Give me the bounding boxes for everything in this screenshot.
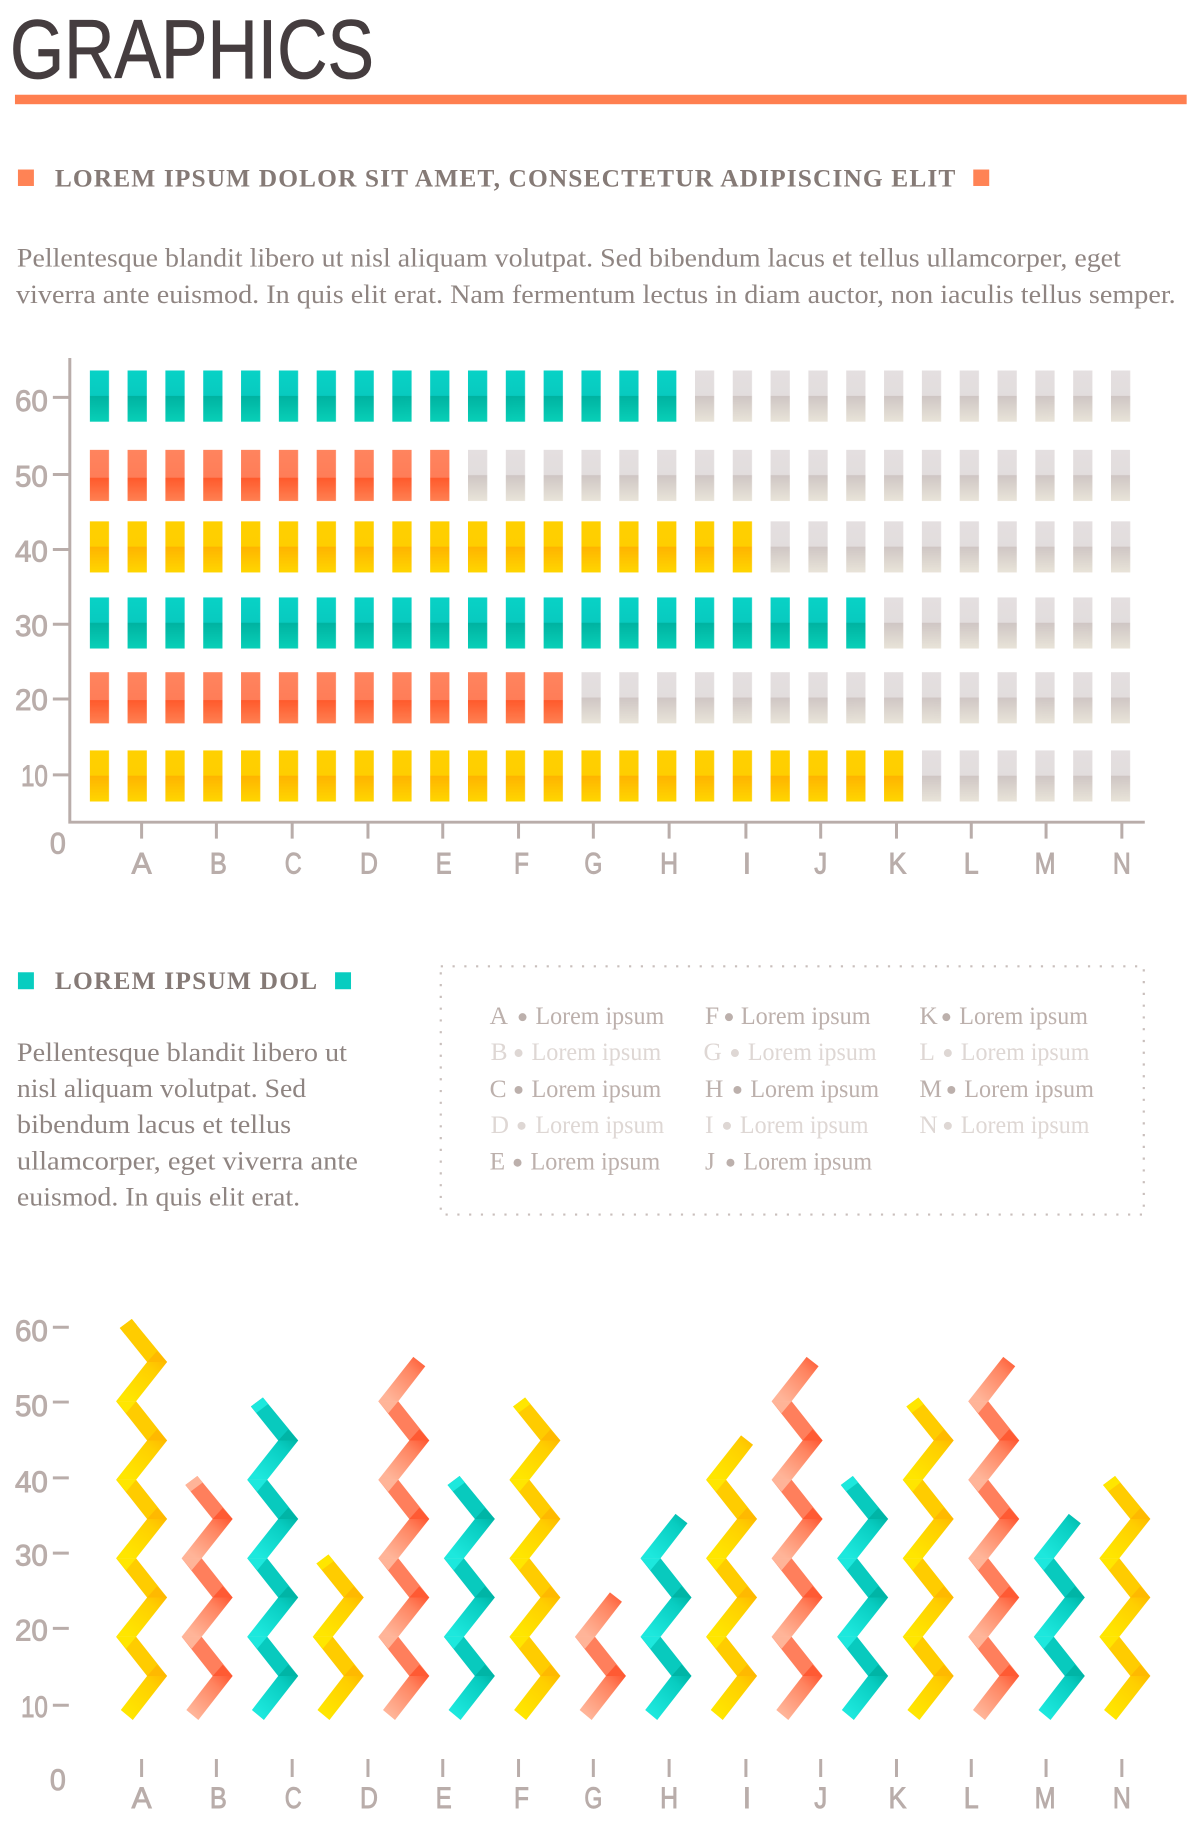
heading: section two: LOREM IPSUM DOL: [55, 967, 317, 995]
legend column three: K: [919, 1002, 938, 1030]
row 50: orange: [90, 450, 1130, 501]
legend column three: M: [919, 1075, 942, 1103]
chart one x labels: B: [210, 848, 227, 881]
chart one y labels: 10: [21, 760, 48, 793]
zigzag 4 yellow: [313, 1554, 364, 1720]
chart two x labels: D: [360, 1782, 378, 1815]
chart two x labels: G: [584, 1782, 602, 1815]
chart one x labels: I: [743, 848, 751, 881]
chart two x labels: K: [889, 1782, 906, 1815]
chart one y labels: 30: [15, 610, 48, 643]
chart one x labels: C: [285, 848, 302, 881]
zigzag 5 orange: [378, 1357, 429, 1720]
chart two ticks: [53, 1327, 1122, 1777]
zigzag 9 teal: [640, 1514, 692, 1720]
chart two y labels: 0: [50, 1764, 66, 1797]
chart one x labels: E: [436, 848, 452, 881]
row 30: teal: [90, 597, 1130, 649]
legend column three: Lorem ipsum: [961, 1111, 1090, 1139]
legend column one: [490, 1002, 664, 1176]
legend column two: J: [705, 1148, 715, 1176]
chart: zigzag columns: [116, 1319, 1150, 1720]
chart two x labels: C: [285, 1782, 302, 1815]
chart one y labels: 40: [15, 535, 48, 568]
chart one y labels: 20: [15, 684, 48, 717]
chart two y labels: 10: [21, 1691, 48, 1724]
legend column two: Lorem ipsum: [743, 1148, 872, 1176]
title: GRAPHICS: [10, 2, 374, 96]
legend column three: N: [919, 1111, 938, 1139]
legend column two: Lorem ipsum: [741, 1002, 871, 1030]
chart: block bars: [90, 370, 1131, 802]
zigzag 11 orange: [772, 1357, 823, 1720]
chart two x labels: N: [1113, 1782, 1131, 1815]
chart two x labels: J: [814, 1782, 827, 1815]
legend column two: H: [705, 1075, 723, 1103]
chart one y labels: [15, 385, 66, 861]
zigzag 12 teal: [837, 1476, 888, 1720]
chart two x labels: B: [210, 1782, 227, 1815]
chart two x labels: E: [436, 1782, 452, 1815]
legend column one: E: [490, 1148, 505, 1176]
legend column two: I: [705, 1111, 713, 1139]
chart one x labels: A: [132, 848, 152, 881]
chart one y labels: 0: [50, 828, 66, 861]
legend column three: Lorem ipsum: [959, 1002, 1088, 1030]
chart one y labels: 50: [15, 461, 48, 494]
legend column one: Lorem ipsum: [531, 1148, 660, 1176]
chart one x labels: M: [1035, 848, 1056, 881]
legend column one: A: [490, 1002, 509, 1030]
section two paragraph: Pellentesque blandit libero ut: [17, 1037, 348, 1067]
chart two x labels: I: [743, 1782, 751, 1815]
legend box: [441, 966, 1144, 1215]
chart two x labels: A: [132, 1782, 152, 1815]
title rule: [15, 95, 1187, 104]
chart two x labels: M: [1035, 1782, 1056, 1815]
legend column two: Lorem ipsum: [748, 1038, 877, 1066]
zigzag 14 orange: [968, 1357, 1019, 1720]
chart two y labels: 50: [15, 1390, 48, 1423]
section two paragraph: ullamcorper, eget viverra ante: [17, 1146, 358, 1176]
chart two y labels: [15, 1315, 66, 1797]
section two paragraph: bibendum lacus et tellus: [17, 1109, 291, 1139]
chart one x labels: G: [584, 848, 602, 881]
chart one x labels: F: [514, 848, 529, 881]
intro paragraph: [16, 242, 1176, 309]
chart one x labels: L: [964, 848, 979, 881]
row 60: teal: [90, 370, 1131, 422]
chart one x labels: J: [814, 848, 827, 881]
legend column two: [704, 1002, 879, 1176]
zigzag 7 yellow: [509, 1398, 560, 1720]
zigzag 1 yellow: [116, 1319, 167, 1720]
intro paragraph: Pellentesque blandit libero ut nisl aliquam volutpat. Sed bibendum lacus et tellus ullamcorper, eget: [17, 242, 1121, 272]
zigzag 2 orange: [182, 1476, 233, 1720]
chart two x labels: L: [964, 1782, 979, 1815]
legend column one: Lorem ipsum: [535, 1111, 664, 1139]
section two paragraph: [17, 1037, 358, 1212]
legend column one: Lorem ipsum: [535, 1002, 664, 1030]
chart one x labels: N: [1113, 848, 1131, 881]
legend column three: L: [919, 1038, 935, 1066]
zigzag 3 teal: [247, 1398, 298, 1720]
chart two y labels: 30: [15, 1540, 48, 1573]
chart one x labels: D: [360, 848, 378, 881]
legend column two: Lorem ipsum: [750, 1075, 879, 1103]
chart one x labels: [132, 848, 1131, 881]
chart two x labels: [132, 1782, 1131, 1815]
legend column three: Lorem ipsum: [964, 1075, 1094, 1103]
zigzag 6 teal: [444, 1476, 495, 1720]
legend column one: Lorem ipsum: [532, 1075, 661, 1103]
zigzag 13 yellow: [903, 1398, 954, 1720]
heading: section one: LOREM IPSUM DOLOR SIT AMET, CONSECTETUR ADIPISCING ELIT: [55, 164, 955, 192]
legend column two: G: [704, 1038, 722, 1066]
zigzag 16 yellow: [1099, 1476, 1150, 1720]
legend column one: Lorem ipsum: [532, 1038, 661, 1066]
chart two y labels: 60: [15, 1315, 48, 1348]
zigzag 10 yellow: [706, 1435, 757, 1720]
chart two y labels: 40: [15, 1466, 48, 1499]
intro paragraph: viverra ante euismod. In quis elit erat. Nam fermentum lectus in diam auctor, non iaculis tellus semper.: [16, 279, 1176, 309]
row 10: yellow: [90, 750, 1130, 802]
legend column three: Lorem ipsum: [961, 1038, 1090, 1066]
chart one y labels: 60: [15, 385, 48, 418]
row 40: yellow: [90, 521, 1131, 573]
legend column two: F: [705, 1002, 719, 1030]
legend column one: D: [491, 1111, 509, 1139]
legend column two: Lorem ipsum: [740, 1111, 869, 1139]
chart two x labels: F: [514, 1782, 529, 1815]
row 20: orange: [90, 672, 1130, 723]
chart two x labels: H: [660, 1782, 678, 1815]
section two paragraph: nisl aliquam volutpat. Sed: [17, 1073, 307, 1103]
zigzag 8 orange: [575, 1592, 626, 1720]
chart one x labels: H: [660, 848, 678, 881]
section two paragraph: euismod. In quis elit erat.: [17, 1182, 300, 1212]
chart one axes: [70, 358, 1145, 822]
chart two y labels: 20: [15, 1614, 48, 1647]
legend column three: [919, 1002, 1094, 1139]
legend column one: B: [491, 1038, 508, 1066]
legend column one: C: [490, 1075, 507, 1103]
zigzag 15 teal: [1034, 1514, 1085, 1720]
chart one x labels: K: [889, 848, 906, 881]
